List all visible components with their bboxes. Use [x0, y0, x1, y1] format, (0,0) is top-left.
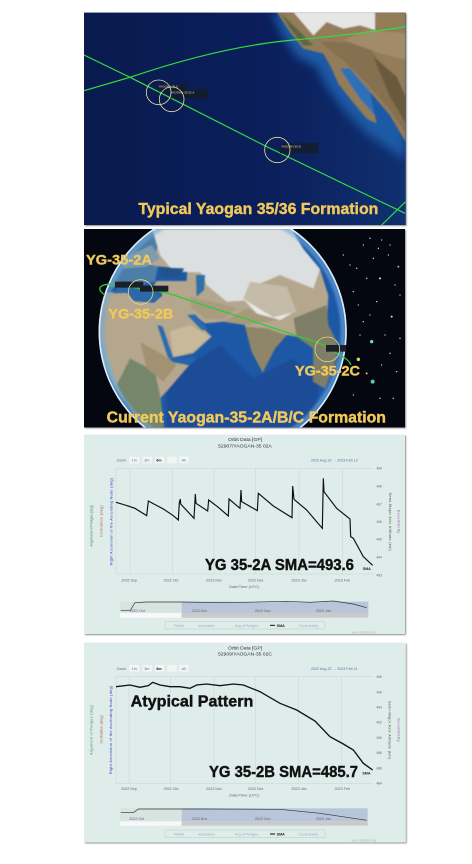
orbit track: [100, 284, 351, 365]
axis titles: [89, 685, 401, 774]
navigator: 2023 Jan: [316, 817, 331, 821]
zoom buttons: All: [182, 459, 186, 463]
chart heading: 52907/YAOGAN-35 02A: [218, 443, 272, 449]
panel: typical formation map: [84, 12, 406, 225]
axis titles: Right Ascension of the Ascending Node (deg): [109, 477, 113, 565]
chart heading: Orbit Data [GP]: [228, 437, 263, 443]
legend: RAAN: [174, 832, 185, 836]
y-axis ticks: 497: [376, 502, 382, 506]
navigator: 2023 Jan: [316, 609, 331, 613]
panel: current formation globe: [84, 229, 407, 430]
legend: SMA: [277, 832, 285, 836]
legend: RAAN: [174, 624, 185, 628]
y-axis ticks: 499: [376, 467, 382, 471]
SMA tag: SMA: [363, 567, 371, 571]
zoom buttons: All: [182, 667, 186, 671]
navigator: [120, 601, 368, 618]
title: current formation: Current Yaogan-35-2A/B/C Formation: [107, 410, 386, 427]
chart heading: [218, 437, 272, 449]
y-axis ticks: 496: [376, 520, 382, 524]
navigator: [120, 808, 368, 826]
navigator: 2022 Oct: [130, 609, 145, 613]
x-axis ticks: [122, 579, 350, 589]
panel: SMA chart YG 35-2A: [84, 435, 405, 634]
y-axis ticks: 495: [376, 538, 382, 542]
axis titles: Argument of Perigee (deg): [90, 504, 94, 547]
satellite markers: [146, 80, 318, 163]
x-axis ticks: Date/Time (UTC): [229, 584, 260, 589]
chart heading: [218, 645, 272, 658]
x-axis ticks: 2022 Nov: [206, 579, 222, 583]
y-axis ticks: 493: [376, 573, 382, 577]
grid: [116, 468, 373, 574]
axis titles: Right Ascension of the Ascending Node (deg): [109, 685, 113, 774]
legend: Inclination: [198, 832, 215, 836]
zoom buttons: 1m: [132, 667, 137, 671]
legend: SMA: [277, 624, 285, 628]
label: YG-35-2B: YG-35-2B: [108, 306, 173, 322]
coastal shelf: [272, 12, 406, 160]
x-axis ticks: 2022 Nov: [206, 787, 222, 791]
x-axis ticks: 2023 Feb: [335, 787, 350, 791]
line chart: SMA: [116, 682, 373, 770]
seas: [113, 268, 208, 365]
navigator: 2022 Nov: [192, 817, 207, 821]
axis titles: Semi-Major Axis Altitude (km): [388, 492, 392, 552]
x-axis ticks: 2022 Dec: [248, 579, 264, 583]
watermark: www.satview.org: [352, 630, 376, 634]
callout: SMA value 2B: YG 35-2B SMA=485.7: [209, 764, 358, 781]
zoom buttons: 6m: [156, 667, 162, 671]
date range: 2022 Aug 22 → 2023 Feb 21: [311, 667, 358, 671]
navigator: 2022 Dec: [192, 609, 207, 613]
line chart: SMA: [116, 478, 373, 565]
stars: [343, 238, 401, 412]
x-axis ticks: 2022 Dec: [248, 787, 264, 791]
watermark: www.satview.org: [352, 838, 376, 842]
chart heading: 52909/YAOGAN-35 02C: [218, 652, 272, 658]
x-axis ticks: 2022 Oct: [164, 787, 178, 791]
orbit tracks: [84, 27, 406, 225]
axis titles: Semi-Major Axis Altitude (km): [387, 701, 391, 760]
x-axis ticks: 2022 Sep: [122, 579, 137, 583]
axis titles: Inclination (deg): [99, 714, 103, 743]
y-axis ticks: 498: [376, 675, 382, 679]
legend: Eccentricity: [299, 832, 318, 836]
panel: typical formation map: YAOGAN-35 B: [281, 144, 301, 148]
zoom buttons: [117, 665, 189, 672]
zoom buttons: 3m: [144, 667, 149, 671]
y-axis ticks: [376, 675, 382, 786]
land and atmosphere: [95, 229, 337, 428]
panel: typical formation map: YAOGAN-35 C: [158, 84, 179, 88]
y-axis ticks: 494: [376, 555, 382, 559]
satellite markers: [115, 280, 346, 362]
zoom buttons: 3m: [144, 459, 149, 463]
axis titles: [90, 477, 400, 565]
globe: [98, 229, 347, 428]
y-axis ticks: 498: [376, 485, 382, 489]
zoom buttons: [117, 457, 189, 463]
label: YG-35-2C: YG-35-2C: [295, 363, 360, 379]
legend: [165, 622, 325, 629]
title: typical formation: Typical Yaogan 35/36 Formation: [138, 201, 378, 218]
navigator: 2022 Oct: [129, 817, 144, 821]
x-axis ticks: 2022 Oct: [164, 579, 178, 583]
y-axis ticks: 494: [376, 706, 382, 710]
date range: 2022 Aug 22 → 2023 Feb 12: [311, 459, 358, 463]
x-axis ticks: 2023 Jan: [291, 579, 307, 583]
axis titles: Argument of Perigee (deg): [89, 704, 93, 755]
legend: Eccentricity: [299, 624, 318, 628]
y-axis ticks: [376, 467, 382, 577]
zoom buttons: Zoom: [117, 459, 126, 463]
legend: Arg of Perigee: [235, 624, 258, 628]
zoom buttons: Zoom: [117, 667, 126, 671]
y-axis ticks: 490: [376, 736, 382, 740]
grid: [116, 677, 373, 783]
callout: SMA value 2A: YG 35-2A SMA=493.6: [205, 557, 354, 574]
axis titles: Eccentricity: [396, 510, 400, 533]
navigator: 2022 Nov: [255, 609, 271, 613]
navigator: 2022 Dec: [255, 817, 271, 821]
x-axis ticks: 2023 Feb: [335, 579, 350, 583]
zoom buttons: 1m: [132, 459, 137, 463]
x-axis ticks: Date/Time (UTC): [229, 792, 260, 797]
SMA tag: SMA: [362, 772, 371, 776]
x-axis ticks: [121, 787, 350, 797]
x-axis ticks: 2023 Jan: [291, 787, 307, 791]
chart heading: Orbit Data [GP]: [228, 645, 263, 651]
legend: Inclination: [198, 624, 215, 628]
panel: typical formation map: YAOGAN-35 02 A: [171, 90, 194, 94]
y-axis ticks: 496: [376, 690, 382, 694]
atmosphere rim: [100, 229, 346, 428]
label: YG-35-2A: YG-35-2A: [86, 251, 152, 267]
zoom buttons: 6m: [156, 459, 162, 463]
axis titles: Eccentricity: [397, 718, 401, 742]
land: North America: [277, 12, 406, 142]
y-axis ticks: 492: [376, 721, 382, 725]
x-axis ticks: 2022 Sep: [121, 787, 137, 791]
y-axis ticks: 486: [376, 767, 382, 771]
y-axis ticks: 488: [376, 751, 382, 755]
callout: atypical pattern: Atypical Pattern: [131, 693, 253, 710]
y-axis ticks: 484: [376, 782, 382, 786]
panel: SMA chart YG 35-2B: [84, 643, 406, 842]
legend: [165, 830, 325, 838]
legend: Arg of Perigee: [235, 832, 258, 836]
axis titles: Inclination (deg): [99, 504, 103, 537]
